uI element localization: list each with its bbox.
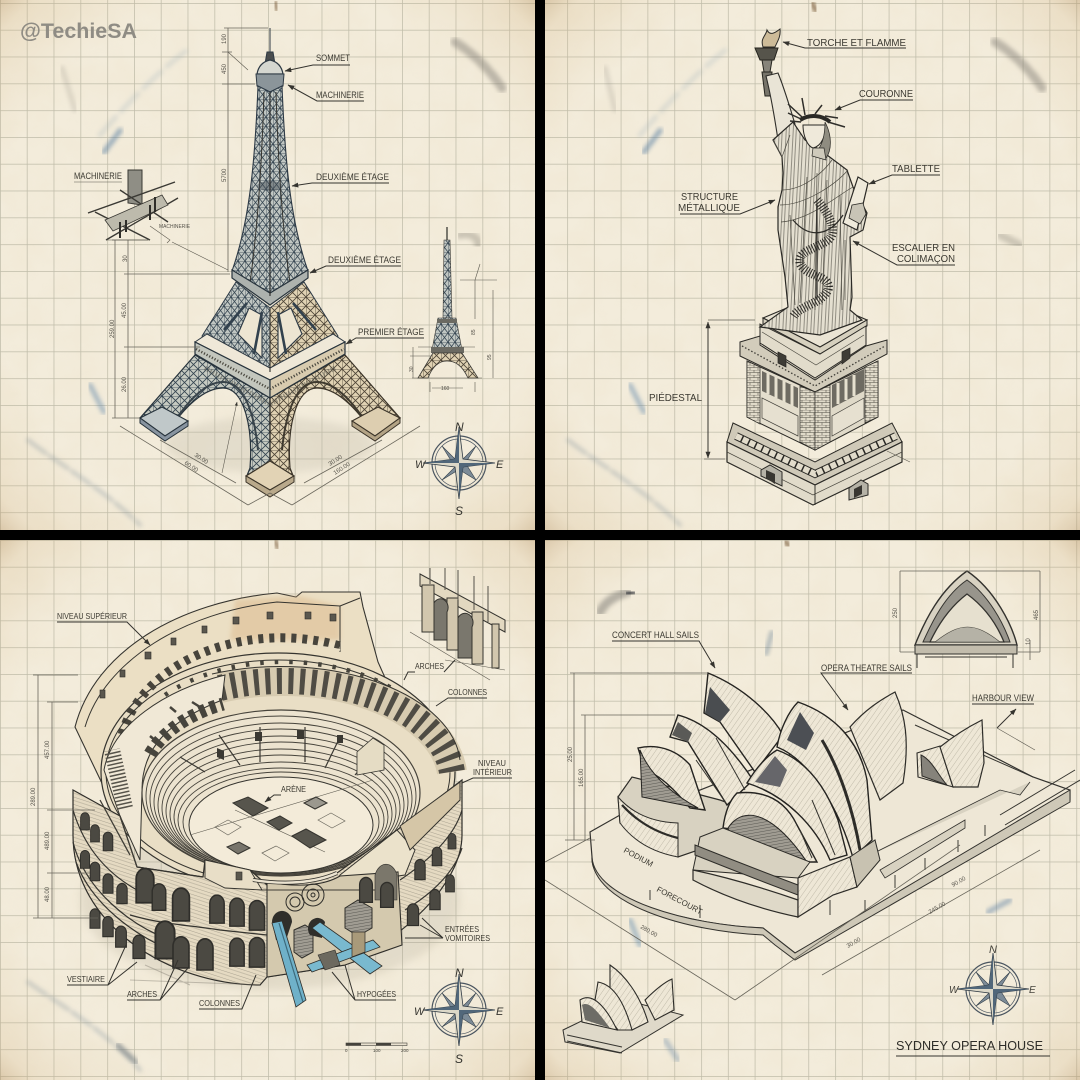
detail inset: machinery junction: MACHINERIE xyxy=(74,171,122,181)
dimension lines around tower: 26.00 xyxy=(122,376,128,392)
icon: compass rose: N xyxy=(455,966,464,980)
label: TORCHE ET FLAMME: TORCHE ET FLAMME xyxy=(807,38,906,49)
label: COURONNE: COURONNE xyxy=(859,89,913,100)
label: FORECOURT: FORECOURT xyxy=(655,885,704,917)
Statue of Liberty drawing xyxy=(727,29,910,505)
label: HARBOUR VIEW xyxy=(972,693,1035,750)
head and crown xyxy=(803,125,825,148)
opera rear sail xyxy=(850,692,906,800)
label: NIVEAU SUPÉRIEUR: NIVEAU SUPÉRIEUR xyxy=(57,611,127,621)
dimension: pedestal height xyxy=(704,320,755,459)
dimensions: 48.00 xyxy=(45,886,51,902)
label: COURONNE xyxy=(835,89,913,110)
icon: compass rose: N xyxy=(989,944,997,956)
small elevation of the tower: 95 xyxy=(487,354,493,360)
label: NIVEAU SUPÉRIEUR xyxy=(57,611,150,645)
dimensions: 289.00 xyxy=(31,787,37,806)
small elevation of the tower: 30 xyxy=(409,366,415,372)
dimensions xyxy=(31,675,98,918)
label: ESCALIER EN COLIMAÇON: ESCALIER EN xyxy=(892,243,955,254)
dimension lines: 90.00 xyxy=(951,876,968,889)
scale bar xyxy=(345,1043,409,1053)
label: ARÈNE xyxy=(265,784,306,802)
sail section inset: 250 xyxy=(893,607,899,618)
icon: compass rose: E xyxy=(496,459,504,471)
dimension lines around tower: 190 xyxy=(222,33,228,44)
hypogeum cutaway xyxy=(267,872,402,977)
dimension lines: 25.00 xyxy=(568,746,574,762)
label: DEUXIÈME ÉTAGE upper: DEUXIÈME ÉTAGE xyxy=(316,172,389,182)
panel: Colosseum blueprint xyxy=(0,540,535,1080)
figure robes xyxy=(760,122,867,335)
panel: Sydney Opera House blueprint xyxy=(545,540,1080,1080)
label: CONCERT HALL SAILS xyxy=(612,630,715,668)
icon: compass rose: W xyxy=(415,459,427,471)
dimension lines xyxy=(545,673,1040,1000)
label: MACHINERIE: MACHINERIE xyxy=(316,90,364,100)
front masonry wall xyxy=(73,780,462,985)
dimension lines around tower: 30 xyxy=(123,255,129,262)
label: PREMIER ÉTAGE xyxy=(346,327,424,344)
label: DEUXIÈME ÉTAGE lower xyxy=(310,255,401,273)
pedestal xyxy=(727,297,910,505)
sail section inset: 10 xyxy=(1026,638,1032,645)
radial vaults xyxy=(220,681,452,772)
left terrace xyxy=(104,675,225,860)
dimensions: 489.00 xyxy=(45,831,51,850)
icon: compass rose xyxy=(949,944,1036,1025)
label: PREMIER ÉTAGE: PREMIER ÉTAGE xyxy=(358,327,424,337)
dimension lines around tower: 30.00 xyxy=(193,453,209,466)
platform xyxy=(590,710,1070,953)
mid-level ring xyxy=(101,653,455,891)
Opera House main drawing xyxy=(590,673,1080,960)
label: ENTRÉES VOMITOIRES: ENTRÉES xyxy=(445,924,479,934)
label: ARCHES lower xyxy=(127,960,188,1000)
icon: compass rose: S xyxy=(455,1052,463,1066)
rim windows xyxy=(165,662,395,695)
label: ARCHES upper xyxy=(404,660,455,680)
label: TABLETTE: TABLETTE xyxy=(892,164,940,175)
small elevation of the tower xyxy=(409,227,497,392)
icon: compass rose: W xyxy=(414,1006,426,1018)
rear small sails xyxy=(917,746,953,787)
blue channels xyxy=(272,921,382,1007)
icon: compass rose: W xyxy=(949,985,960,996)
right inner cut xyxy=(335,830,415,885)
label: NIVEAU INTÉRIEUR: NIVEAU xyxy=(478,758,506,768)
Eiffel Tower main drawing xyxy=(140,28,400,497)
label: PODIUM: PODIUM xyxy=(622,846,655,869)
label: STRUCTURE MÉTALLIQUE: MÉTALLIQUE xyxy=(678,201,740,214)
outer arches xyxy=(80,813,456,970)
label: CONCERT HALL SAILS: CONCERT HALL SAILS xyxy=(612,630,699,640)
title: SYDNEY OPERA HOUSE: SYDNEY OPERA HOUSE xyxy=(896,1038,1043,1053)
scale bar: 200 xyxy=(401,1048,409,1053)
seating rings xyxy=(142,710,420,876)
icon: compass rose xyxy=(414,966,504,1066)
dimensions: 457.00 xyxy=(45,740,51,759)
label: ARÈNE: ARÈNE xyxy=(281,784,306,794)
dimension lines: 165.00 xyxy=(579,768,585,787)
label: SOMMET xyxy=(285,53,350,71)
concert base xyxy=(618,777,742,857)
dimension lines around tower: 45.00 xyxy=(122,302,128,318)
label: ENTRÉES VOMITOIRES xyxy=(405,918,490,943)
label: ENTRÉES VOMITOIRES: VOMITOIRES xyxy=(445,933,490,943)
icon: compass rose: S xyxy=(455,504,463,518)
Colosseum drawing xyxy=(73,592,462,1007)
label: ARCHES upper: ARCHES xyxy=(415,661,444,671)
spiral stair xyxy=(793,200,832,317)
tablet and hand xyxy=(843,177,868,230)
scale bar: 100 xyxy=(373,1048,381,1053)
arm xyxy=(766,73,795,140)
sail section inset xyxy=(893,571,1040,668)
inset: arcade detail xyxy=(410,568,505,680)
label: ARCHES lower: ARCHES xyxy=(127,989,157,999)
icon: compass rose: E xyxy=(1029,985,1036,996)
label: DEUXIÈME ÉTAGE lower: DEUXIÈME ÉTAGE xyxy=(328,255,401,265)
icon: compass rose: E xyxy=(496,1006,504,1018)
small opera sketch xyxy=(563,965,683,1053)
label: HYPOGÉES xyxy=(332,965,396,1000)
dimension lines: 245.00 xyxy=(928,901,947,916)
label: HYPOGÉES: HYPOGÉES xyxy=(357,989,396,999)
dimension lines around tower: 30.00 xyxy=(328,454,344,468)
panel: Statue of Liberty blueprint xyxy=(545,0,1080,530)
concert sails xyxy=(704,673,783,772)
wall block with window xyxy=(100,800,262,890)
label: VESTIAIRE: VESTIAIRE xyxy=(67,974,105,984)
opera big sails xyxy=(777,702,872,858)
label: COLONNES lower xyxy=(199,975,256,1009)
icon: compass rose: N xyxy=(455,420,464,434)
sail section inset: 465 xyxy=(1034,609,1040,620)
dimension lines around tower: 160.00 xyxy=(333,461,352,477)
label: COLONNES upper xyxy=(436,687,487,706)
detail inset: machinery junction: MACHINERIE xyxy=(159,224,191,230)
label: SOMMET: SOMMET xyxy=(316,53,350,63)
scale bar: 0 xyxy=(345,1048,348,1053)
label: PIÉDESTAL: PIÉDESTAL xyxy=(649,391,702,404)
watermark: @TechieSA xyxy=(20,20,137,43)
label: ESCALIER EN COLIMAÇON xyxy=(853,241,955,265)
icon: compass rose xyxy=(415,420,504,518)
dimension lines around tower: 60.00 xyxy=(183,461,199,474)
label: STRUCTURE MÉTALLIQUE xyxy=(678,192,775,214)
label: ESCALIER EN COLIMAÇON: COLIMAÇON xyxy=(897,254,955,265)
small elevation of the tower: 160 xyxy=(441,386,450,392)
dimension lines: 30.00 xyxy=(846,937,863,950)
label: DEUXIÈME ÉTAGE upper xyxy=(292,172,389,186)
torch xyxy=(755,29,780,96)
dimension lines around tower: 259.00 xyxy=(110,319,116,338)
label: OPERA THEATRE SAILS: OPERA THEATRE SAILS xyxy=(821,663,912,673)
label: MACHINERIE xyxy=(288,85,364,101)
label: NIVEAU INTÉRIEUR: INTÉRIEUR xyxy=(473,767,512,777)
detail inset: machinery junction xyxy=(74,170,228,270)
arena xyxy=(189,777,373,873)
label: COLONNES lower: COLONNES xyxy=(199,998,240,1008)
small elevation of the tower: 85 xyxy=(471,329,477,335)
dimension lines around tower xyxy=(110,28,420,505)
opera base xyxy=(693,828,810,878)
panel: Eiffel Tower blueprint xyxy=(0,0,535,530)
stone ledges xyxy=(73,810,462,950)
upper windows xyxy=(100,612,336,698)
label: HARBOUR VIEW: HARBOUR VIEW xyxy=(972,693,1034,703)
back upper wall xyxy=(75,592,440,800)
dimension lines around tower: 450 xyxy=(222,63,228,74)
dimension lines: 280.00 xyxy=(639,925,658,939)
label: TABLETTE xyxy=(869,164,940,184)
label: COLONNES upper: COLONNES xyxy=(448,687,487,697)
dimension lines around tower: 5700 xyxy=(222,168,228,182)
label: OPERA THEATRE SAILS xyxy=(821,663,912,710)
label: NIVEAU INTÉRIEUR xyxy=(462,758,512,783)
label: VESTIAIRE xyxy=(67,945,137,985)
label: STRUCTURE MÉTALLIQUE: STRUCTURE xyxy=(681,192,738,203)
